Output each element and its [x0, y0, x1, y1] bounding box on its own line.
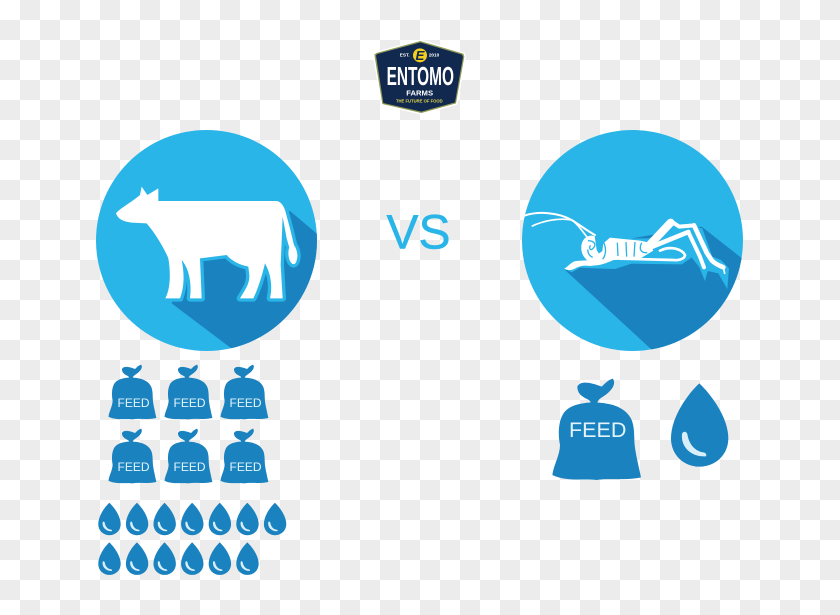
logo: Entomo Farms badge: FARMS — [406, 88, 433, 97]
icon: feed bag 5: FEED — [173, 460, 206, 474]
icon: cow silhouette — [116, 187, 297, 298]
logo: Entomo Farms badge: ENTOMO — [387, 61, 454, 91]
icon: feed bag 5 — [164, 429, 212, 483]
logo: Entomo Farms badge: 2010 — [429, 53, 440, 58]
group: six feed bags — [108, 365, 268, 483]
icon: feed bag 1: FEED — [117, 396, 150, 410]
icon: feed bag 4: FEED — [117, 460, 150, 474]
icon: feed bag 6 — [220, 429, 268, 483]
icon: feed bag 2: FEED — [173, 396, 206, 410]
icon: feed bag 3 — [220, 365, 268, 419]
text: VS: VS — [386, 206, 451, 260]
group: thirteen water drops — [98, 503, 286, 575]
icon: feed bag 6: FEED — [229, 460, 262, 474]
icon: feed bag 4 — [108, 429, 156, 483]
cricket front leg and foot — [564, 245, 623, 270]
icon: large feed bag — [552, 379, 641, 480]
icon: feed bag 1 — [108, 365, 156, 419]
panel: cow circle — [96, 130, 323, 365]
panel: cricket circle — [522, 130, 748, 365]
logo: Entomo Farms badge: E — [416, 48, 426, 63]
cricket halo — [565, 225, 729, 289]
icon: large water drop — [671, 383, 728, 467]
logo: Entomo Farms badge: EST. — [400, 53, 410, 58]
cricket head marks — [588, 241, 595, 257]
cricket head and body — [581, 236, 653, 263]
logo: Entomo Farms badge — [373, 39, 466, 115]
icon: cricket — [524, 213, 725, 273]
icon: feed bag 3: FEED — [229, 396, 262, 410]
logo: Entomo Farms badge: THE FUTURE OF FOOD — [396, 99, 443, 104]
icon: feed bag 2 — [164, 365, 212, 419]
icon: large feed bag: FEED — [569, 418, 626, 442]
